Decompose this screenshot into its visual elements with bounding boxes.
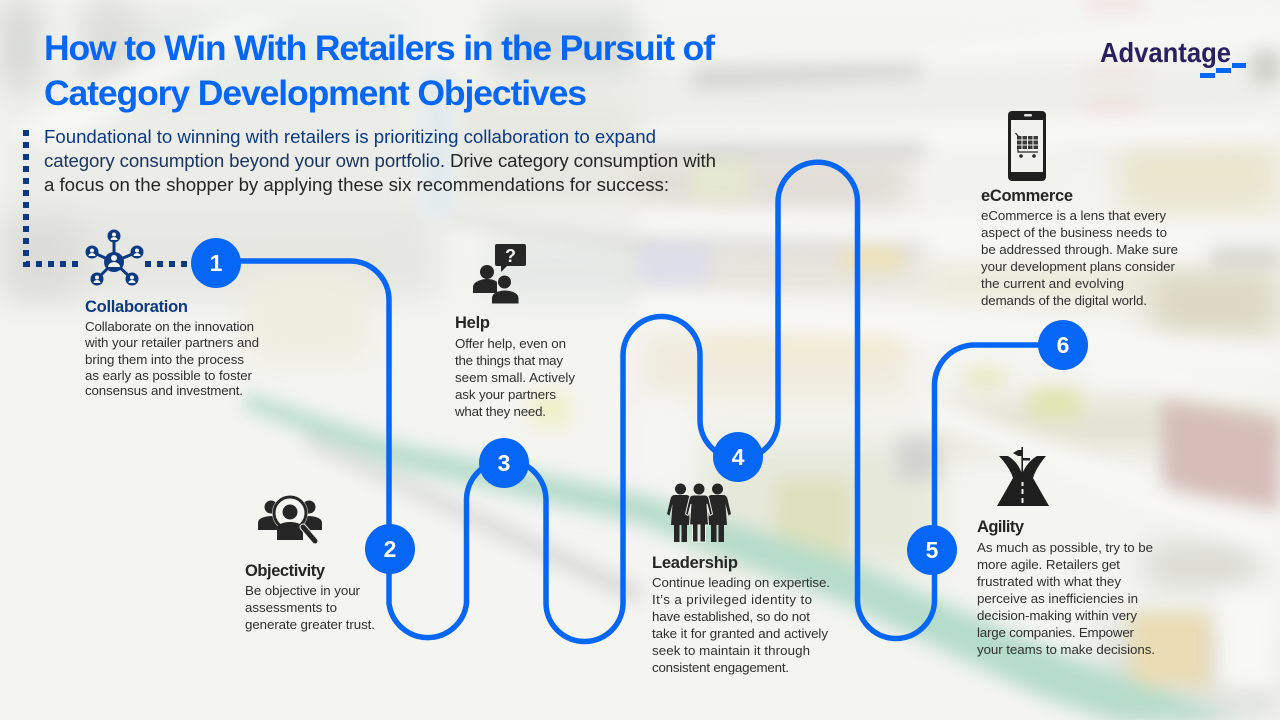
- text block: Agility: decision-making within very: [977, 608, 1137, 623]
- icon: help people with question bubble: [473, 244, 526, 304]
- step marker 1: [191, 238, 241, 288]
- text block: Leadership: take it for granted and actively: [652, 626, 828, 641]
- text block: Agility: frustrated with what they: [977, 574, 1121, 589]
- text block: Help: the things that may: [455, 353, 563, 368]
- icon: collaboration network: [86, 230, 144, 286]
- step marker 6: [1038, 320, 1088, 370]
- title: How to Win With Retailers in the Pursuit of: [44, 28, 715, 68]
- text block: Collaboration: as early as possible to foster: [85, 368, 253, 383]
- text block: Help: ask your partners: [455, 387, 556, 402]
- text block: eCommerce: demands of the digital world.: [981, 293, 1147, 308]
- text block: Agility: As much as possible, try to be: [977, 540, 1153, 555]
- winding blue path: [216, 162, 1063, 642]
- icon: help people with question bubble: ?: [505, 246, 516, 266]
- text block: Objectivity: Objectivity: [245, 562, 326, 580]
- text block: Agility: more agile. Retailers get: [977, 557, 1120, 572]
- text block: Help: seem small. Actively: [455, 370, 575, 385]
- icon: mobile phone with shopping cart: [1008, 111, 1046, 181]
- title: Category Development Objectives: [44, 73, 587, 113]
- text block: Help: [454, 314, 575, 419]
- title: [44, 28, 715, 113]
- text block: eCommerce: be addressed through. Make sure: [981, 242, 1178, 257]
- intro text: category consumption beyond your own portfolio. Drive category consumption with: [44, 150, 716, 171]
- text block: Collaboration: Collaboration: [85, 298, 188, 316]
- text block: eCommerce: [981, 187, 1178, 308]
- text block: eCommerce: eCommerce: [981, 187, 1073, 205]
- step marker 2: [365, 524, 415, 574]
- text block: Help: Help: [455, 314, 490, 332]
- text block: Collaboration: with your retailer partners and: [84, 335, 259, 350]
- text block: Help: Offer help, even on: [455, 336, 566, 351]
- text block: Collaboration: Collaborate on the innovation: [85, 319, 254, 334]
- step marker 3: 3: [498, 450, 510, 476]
- text block: Agility: your teams to make decisions.: [977, 642, 1155, 657]
- text block: Objectivity: Be objective in your: [245, 583, 361, 598]
- step marker 4: 4: [732, 444, 745, 470]
- text block: Leadership: have established, so do not: [652, 609, 810, 624]
- text block: Agility: large companies. Empower: [977, 625, 1135, 640]
- text block: eCommerce: your development plans consider: [981, 259, 1176, 274]
- text block: eCommerce: eCommerce is a lens that every: [981, 208, 1166, 223]
- intro text: Foundational to winning with retailers is prioritizing collaboration to expand: [44, 126, 656, 147]
- text block: Agility: [977, 518, 1155, 657]
- text block: Agility: perceive as inefficiencies in: [977, 591, 1138, 606]
- text block: Collaboration: [84, 298, 259, 398]
- text block: Leadership: It’s a privileged identity to: [652, 592, 812, 607]
- logo: Advantage: Advantage: [1100, 37, 1231, 68]
- text block: Collaboration: consensus and investment.: [85, 383, 243, 398]
- text block: Help: what they need.: [454, 404, 546, 419]
- step marker 6: 6: [1057, 332, 1069, 358]
- step marker 2: 2: [384, 536, 396, 562]
- text block: Objectivity: generate greater trust.: [245, 617, 375, 632]
- text block: Agility: Agility: [977, 518, 1025, 536]
- text block: Objectivity: assessments to: [245, 600, 337, 615]
- text block: Leadership: consistent engagement.: [652, 660, 789, 675]
- step marker 5: [907, 525, 957, 575]
- text block: Leadership: seek to maintain it through: [652, 643, 810, 658]
- intro text: a focus on the shopper by applying these six recommendations for success:: [44, 174, 669, 195]
- icon: forked road with signpost: [997, 447, 1049, 506]
- step marker 4: [713, 432, 763, 482]
- intro text: [44, 126, 716, 195]
- step marker 3: [479, 438, 529, 488]
- text block: eCommerce: the current and evolving: [981, 276, 1124, 291]
- text block: Objectivity: [245, 562, 375, 632]
- text block: Collaboration: bring them into the process: [85, 352, 244, 367]
- dotted connector lines: [26, 130, 190, 264]
- step marker 1: 1: [210, 250, 223, 276]
- text block: Leadership: [652, 554, 830, 675]
- text block: eCommerce: aspect of the business needs to: [981, 225, 1167, 240]
- text block: Leadership: Continue leading on expertise.: [652, 575, 830, 590]
- step marker 5: 5: [926, 537, 939, 563]
- icon: leadership three women: [667, 484, 731, 542]
- icon: objectivity magnifier over people: [258, 495, 322, 541]
- text block: Leadership: Leadership: [652, 554, 738, 572]
